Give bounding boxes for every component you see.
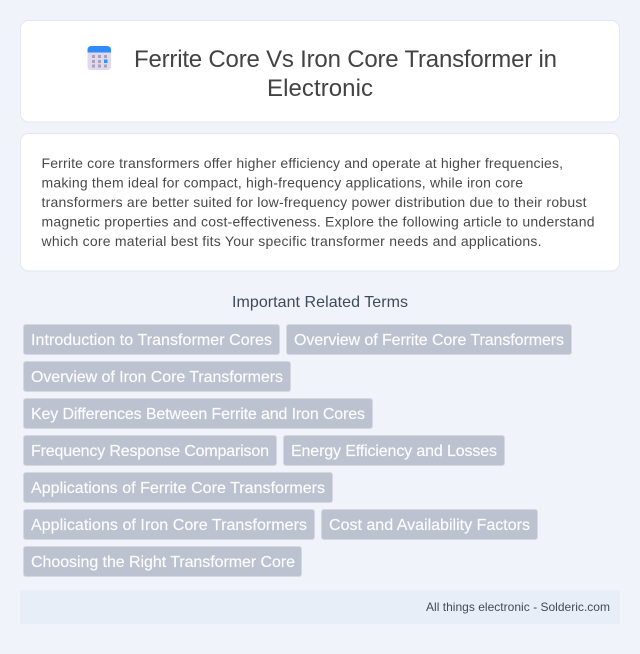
panel: title card [20,20,620,122]
tag: Applications of Ferrite Core Transformers [24,472,332,502]
tag: Energy Efficiency and Losses [284,436,504,466]
tag: Cost and Availability Factors [322,510,538,540]
tag: Overview of Ferrite Core Transformers [286,324,572,354]
tag: Frequency Response Comparison: Frequency Response Comparison [31,443,269,460]
panel: introduction [20,134,620,271]
title: Electronic [267,75,373,102]
tag: Introduction to Transformer Cores: Introduction to Transformer Cores [31,332,272,349]
text block: introduction paragraph: transformers are better suited for low-frequency power distribution due to their robust [42,194,587,210]
text block: introduction paragraph: making them ideal for compact, high-frequency applications, while iron core [42,174,523,190]
tag: Choosing the Right Transformer Core: Choosing the Right Transformer Core [31,554,295,571]
tag: Cost and Availability Factors: Cost and Availability Factors [329,517,530,534]
tag: Applications of Iron Core Transformers [24,510,314,540]
tag: Choosing the Right Transformer Core [24,546,302,576]
tag: Overview of Iron Core Transformers: Overview of Iron Core Transformers [31,369,283,386]
heading: important related terms: Important Related Terms [232,294,408,311]
text block: introduction paragraph: Ferrite core transformers offer higher efficiency and operate at higher frequencies, [42,155,563,171]
footer: All things electronic - Solderic.com [426,600,610,614]
tag: Applications of Iron Core Transformers: Applications of Iron Core Transformers [31,517,307,534]
tag: Key Differences Between Ferrite and Iron Cores [24,398,372,428]
tag: Key Differences Between Ferrite and Iron Cores: Key Differences Between Ferrite and Iron Cores [31,406,365,423]
tag: Frequency Response Comparison [24,436,276,466]
icon: calendar [88,46,111,70]
title: Ferrite Core Vs Iron Core Transformer in [134,46,557,73]
text block: introduction paragraph [40,155,594,249]
text block: introduction paragraph: which core material best fits Your specific transformer needs and applications. [40,233,542,249]
footer [20,590,620,624]
tag: Overview of Iron Core Transformers [24,362,290,392]
tag: Overview of Ferrite Core Transformers: Overview of Ferrite Core Transformers [294,332,564,349]
title [134,46,557,102]
tag: Applications of Ferrite Core Transformers: Applications of Ferrite Core Transformers [31,480,325,497]
tag: Introduction to Transformer Cores [24,324,280,354]
tag: Energy Efficiency and Losses: Energy Efficiency and Losses [291,443,497,460]
text block: introduction paragraph: magnetic properties and cost-effectiveness. Explore the following article to understand [42,214,594,230]
